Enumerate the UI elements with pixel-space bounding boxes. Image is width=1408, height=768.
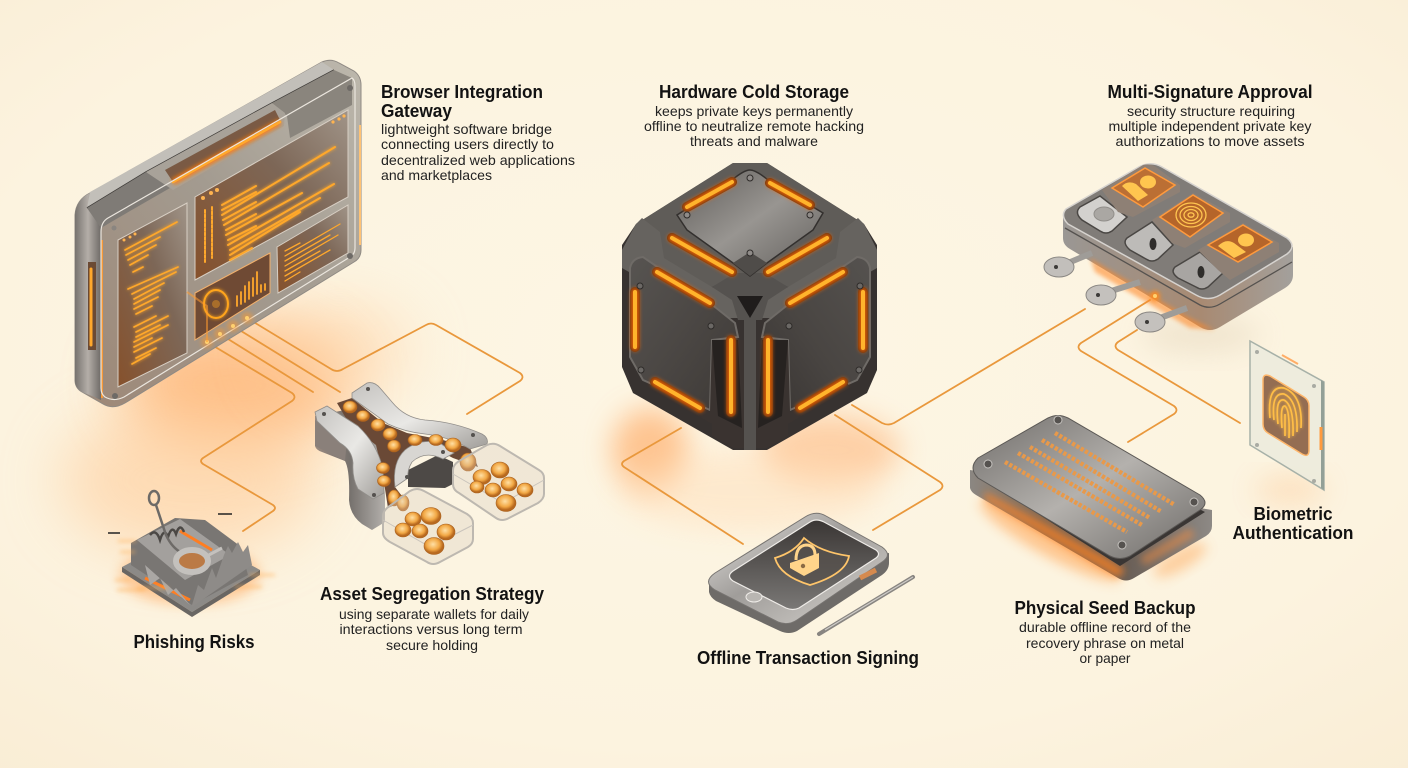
title: physical seed backup: [1014, 598, 1196, 666]
sparks: [115, 541, 275, 590]
key slot button 1: [1077, 164, 1180, 233]
icon: physical seed metal plate: [970, 416, 1212, 580]
key slot button 2: [1125, 193, 1230, 261]
icon: biometric authentication card: [1250, 341, 1324, 490]
title: physical seed backup: recovery phrase on metal: [1026, 635, 1184, 651]
title: hardware cold storage: [644, 82, 864, 149]
fingerprint ridges: [1176, 203, 1206, 227]
title: browser integration gateway: Gateway: [381, 101, 452, 121]
title: browser integration gateway: and marketplaces: [381, 167, 492, 183]
title: multi-signature approval: authorizations to move assets: [1116, 133, 1304, 149]
icon: hardware cold storage cube: [622, 163, 877, 450]
icon: multi-signature key device: [1044, 164, 1293, 332]
metal keys: [1044, 253, 1187, 332]
lower arm: [315, 406, 384, 499]
title: multi-signature approval: [1108, 82, 1312, 149]
trap spring: [150, 527, 184, 540]
title: hardware cold storage: threats and malware: [690, 133, 818, 149]
engraved seed words: [1005, 433, 1175, 532]
icon: asset segregation splitter with coin bins: [315, 383, 544, 564]
title: browser integration gateway: Browser Integration: [381, 82, 543, 102]
icon: offline signing tablet and stylus: [708, 513, 913, 634]
title: multi-signature approval: multiple independent private key: [1108, 118, 1312, 134]
coins in chute: [343, 401, 476, 511]
dashboard pane: [195, 253, 270, 340]
title: browser integration gateway: [381, 82, 575, 183]
coin channel: [337, 398, 478, 508]
trap teeth: [192, 542, 252, 607]
title: hardware cold storage: Hardware Cold Storage: [659, 82, 849, 102]
title: physical seed backup: durable offline record of the: [1019, 619, 1191, 635]
title: hardware cold storage: keeps private keys permanently: [655, 103, 853, 119]
left code pane: [118, 203, 187, 387]
title: asset segregation strategy: interactions versus long term: [340, 621, 522, 637]
hook and ring: [149, 491, 222, 572]
title: asset segregation strategy: Asset Segregation Strategy: [320, 584, 544, 604]
stylus: [819, 577, 913, 634]
title: asset segregation strategy: secure holding: [386, 637, 478, 653]
title: multi-signature approval: security structure requiring: [1127, 103, 1295, 119]
fingerprint: [1270, 388, 1301, 438]
title: asset segregation strategy: [320, 584, 544, 653]
title: browser integration gateway: connecting users directly to: [381, 136, 554, 152]
cube left face panel: [630, 257, 738, 410]
connector lines: [201, 300, 1240, 544]
upper coin bin: [453, 444, 544, 520]
cube top frame: [622, 163, 877, 287]
title: multi-signature approval: Multi-Signature Approval: [1108, 82, 1312, 102]
title: physical seed backup: or paper: [1080, 650, 1131, 666]
main code pane: [195, 110, 348, 280]
icon: phishing trap: [108, 491, 275, 617]
title: offline transaction signing: Offline Transaction Signing: [697, 648, 919, 668]
title: biometric authentication: [1232, 504, 1354, 543]
title: browser integration gateway: lightweight software bridge: [381, 121, 552, 137]
title: phishing risks: Phishing Risks: [134, 632, 254, 652]
cube right face panel: [762, 257, 870, 410]
upper arm: [352, 383, 487, 449]
cube top plate: [677, 170, 823, 276]
right note pane: [277, 205, 348, 293]
lower coin bin: [383, 489, 473, 564]
title: asset segregation strategy: using separate wallets for daily: [339, 606, 529, 622]
title: browser integration gateway: decentralized web applications: [381, 152, 575, 168]
center U: [394, 442, 454, 487]
title: physical seed backup: Physical Seed Backup: [1014, 598, 1196, 618]
cube glowing bars: [635, 182, 863, 412]
icon: browser integration gateway panel: [75, 60, 361, 407]
splitter walls: [315, 410, 385, 530]
title: biometric authentication: Authentication: [1232, 523, 1354, 543]
title: hardware cold storage: offline to neutralize remote hacking: [644, 118, 864, 134]
shield lock icon: [775, 538, 849, 585]
floor glows: [60, 305, 1325, 593]
title: biometric authentication: Biometric: [1254, 504, 1332, 524]
key slot button 3: [1173, 223, 1279, 289]
